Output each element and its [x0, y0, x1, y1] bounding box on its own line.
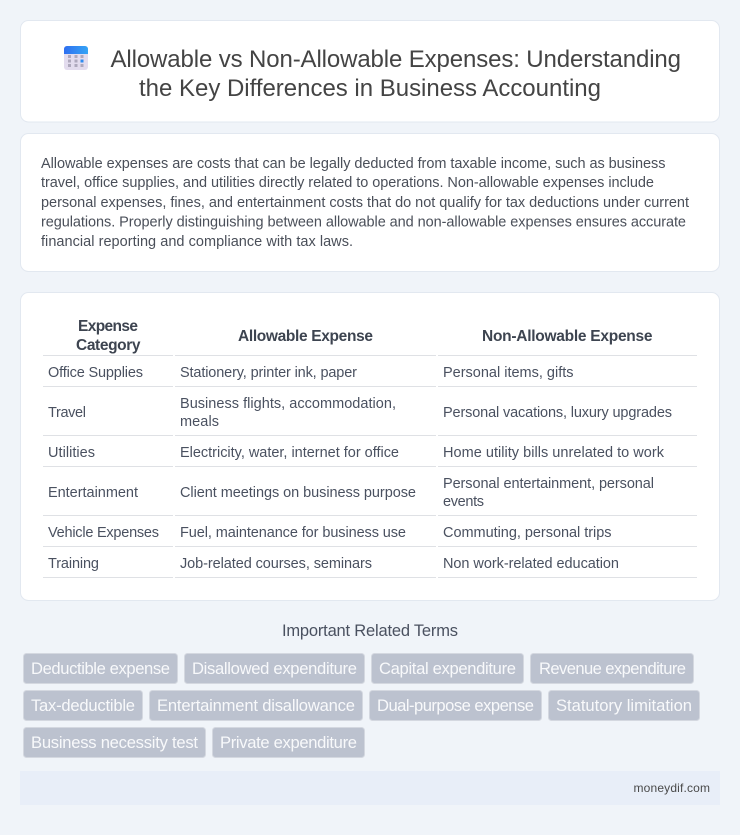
- table header: Expense: [78, 318, 138, 335]
- chip: [24, 728, 206, 758]
- row: training: Training: [48, 556, 99, 572]
- chip: [530, 654, 694, 684]
- chip: [24, 654, 178, 684]
- row: office supplies: [48, 365, 574, 381]
- chip: [372, 654, 524, 684]
- heading: important related terms: Important Related Terms: [282, 622, 458, 640]
- chip: Tax-deductible: [31, 696, 135, 715]
- chip: Entertainment disallowance: [157, 696, 355, 715]
- text block: description: personal expenses, fines, and entertainment costs that do not qualify for tax deductions under current: [41, 195, 689, 211]
- chip: [370, 690, 542, 720]
- panel: comparison table: [20, 292, 720, 600]
- table header: Non-Allowable Expense: [482, 328, 653, 345]
- row: travel: Personal vacations, luxury upgrades: [443, 405, 672, 421]
- chip: Revenue expenditure: [539, 659, 686, 678]
- chip: Business necessity test: [31, 733, 198, 752]
- text block: description: [41, 156, 689, 250]
- chip: Dual-purpose expense: [377, 696, 534, 715]
- chip: [24, 690, 142, 720]
- text block: description: financial reporting and compliance with tax laws.: [41, 234, 353, 250]
- chip: Deductible expense: [31, 659, 170, 678]
- row: training: [48, 556, 619, 572]
- row: training: Non work-related education: [443, 556, 619, 572]
- row: training: Job-related courses, seminars: [180, 556, 372, 572]
- row: travel: meals: [180, 414, 219, 430]
- row: entertainment: Personal entertainment, personal: [443, 476, 654, 492]
- title: the Key Differences in Business Accounting: [139, 75, 601, 102]
- table header: [76, 318, 653, 354]
- row: office supplies: Office Supplies: [48, 365, 143, 381]
- table header: Allowable Expense: [238, 328, 373, 345]
- footer: moneydif.com: [634, 781, 710, 795]
- chip: [150, 690, 362, 720]
- chip: [212, 728, 364, 758]
- row: vehicle expenses: [48, 525, 612, 541]
- row: travel: [48, 396, 672, 430]
- row: vehicle expenses: Vehicle Expenses: [48, 525, 159, 541]
- row: travel: Travel: [48, 405, 86, 421]
- row: utilities: Home utility bills unrelated to work: [443, 445, 665, 461]
- row: vehicle expenses: Fuel, maintenance for business use: [180, 525, 406, 541]
- row: entertainment: Client meetings on business purpose: [180, 485, 416, 501]
- icon: calendar: [64, 46, 88, 70]
- title: [110, 46, 681, 102]
- row: vehicle expenses: Commuting, personal trips: [443, 525, 612, 541]
- related terms chips: [24, 654, 700, 758]
- row: travel: Business flights, accommodation,: [180, 396, 396, 412]
- row: utilities: Utilities: [48, 445, 95, 461]
- chip: Disallowed expenditure: [192, 659, 357, 678]
- title: Allowable vs Non-Allowable Expenses: Understanding: [110, 46, 681, 73]
- row: office supplies: Personal items, gifts: [443, 365, 574, 381]
- text block: description: regulations. Properly distinguishing between allowable and non-allowable expenses ensures accurate: [41, 214, 686, 230]
- chip: Capital expenditure: [379, 659, 516, 678]
- chip: Private expenditure: [220, 733, 357, 752]
- text block: description: travel, office supplies, and utilities directly related to operations. Non-allowable expenses include: [41, 175, 654, 191]
- row: utilities: [48, 445, 665, 461]
- text block: description: Allowable expenses are costs that can be legally deducted from taxable income, such as business: [41, 156, 666, 172]
- row: office supplies: Stationery, printer ink, paper: [180, 365, 357, 381]
- panel: description: [20, 134, 720, 272]
- row: utilities: Electricity, water, internet for office: [180, 445, 399, 461]
- chip: [184, 654, 364, 684]
- row: entertainment: Entertainment: [48, 485, 138, 501]
- table header: Category: [76, 337, 141, 354]
- chip: Statutory limitation: [556, 696, 692, 715]
- chip: [548, 690, 700, 720]
- panel: header: [20, 20, 720, 122]
- footer: [20, 771, 720, 805]
- row: entertainment: events: [443, 494, 484, 510]
- row: entertainment: [48, 476, 654, 510]
